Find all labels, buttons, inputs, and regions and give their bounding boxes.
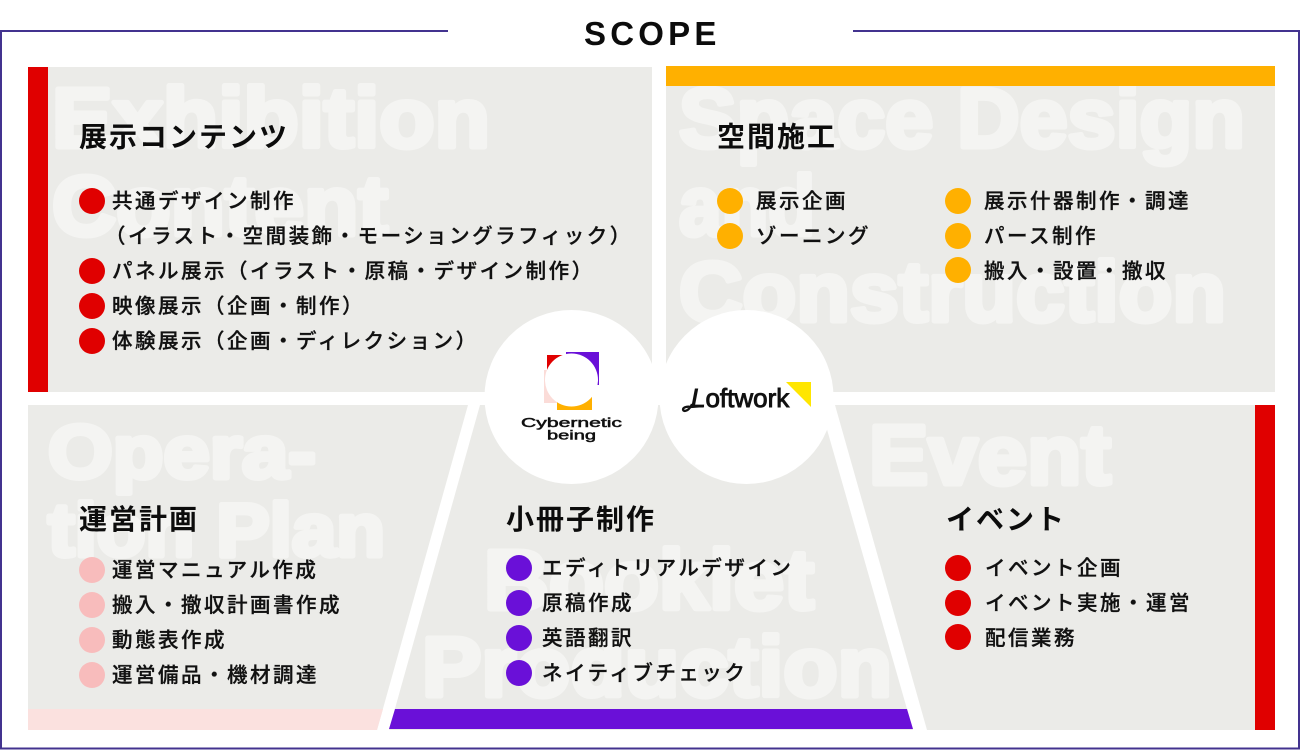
logo text: cybernetic being — [521, 415, 623, 442]
ghost text: event: Event — [869, 408, 1111, 502]
list: exhibition content: 体験展示（企画・ディレクション） — [112, 329, 479, 353]
ghost text: space design and construction: and — [679, 159, 815, 253]
title: SCOPE — [584, 15, 721, 52]
panel: event — [835, 405, 1275, 730]
ghost text: exhibition content: Exhibition — [52, 71, 490, 165]
list: space design left: ゾーニング — [756, 225, 871, 248]
ghost text: space design and construction: Space Design — [679, 71, 1245, 165]
ghost text: space design and construction: Construction — [679, 245, 1226, 339]
ghost text: booklet production: Production — [422, 620, 892, 714]
list: operation plan: 搬入・撤収計画書作成 — [112, 594, 342, 617]
ghost text: operation plan: tion Plan — [48, 488, 385, 572]
list: event: イベント実施・運営 — [985, 592, 1192, 615]
list: exhibition content: 共通デザイン制作 — [112, 189, 296, 213]
ghost text: booklet production: Booklet — [484, 533, 814, 627]
list: space design left: 展示企画 — [756, 190, 848, 213]
heading: space design: 空間施工 — [717, 122, 837, 152]
list: operation plan: 動態表作成 — [112, 629, 227, 652]
list: space design right: 展示什器制作・調達 — [984, 190, 1191, 213]
list: space design right: パース制作 — [984, 225, 1098, 248]
heading: booklet production: 小冊子制作 — [506, 504, 656, 535]
icon: loftwork triangle — [786, 382, 811, 407]
list: booklet production — [506, 555, 793, 686]
list: operation plan: 運営備品・機材調達 — [112, 664, 319, 687]
logo text: loftwork: Loftwork — [691, 383, 790, 413]
list: exhibition content: パネル展示（イラスト・原稿・デザイン制作） — [112, 259, 595, 283]
list: event — [945, 555, 1192, 650]
list: space design right — [945, 188, 1191, 283]
logo text: cybernetic being: being — [547, 428, 596, 442]
panel: exhibition content — [28, 67, 652, 392]
logo text: cybernetic being: Cybernetic — [521, 415, 623, 430]
panel: operation plan — [28, 405, 468, 730]
ghost text: operation plan: Opera- — [48, 410, 316, 494]
heading: event: イベント — [946, 504, 1066, 535]
list: operation plan: 運営マニュアル作成 — [112, 559, 318, 582]
list: booklet production: 原稿作成 — [542, 592, 634, 615]
ghost text: exhibition content: Content — [52, 159, 388, 253]
list: event: 配信業務 — [985, 627, 1077, 650]
panel: booklet production — [389, 405, 913, 730]
list: exhibition content: （イラスト・空間装飾・モーショングラフィック） — [105, 225, 633, 248]
icon: cybernetic being mark — [544, 352, 599, 410]
list: space design right: 搬入・設置・撤収 — [984, 260, 1168, 283]
heading: operation plan: 運営計画 — [79, 504, 199, 535]
list: exhibition content: 映像展示（企画・制作） — [112, 295, 365, 318]
list: booklet production: 英語翻訳 — [542, 627, 634, 650]
list: event: イベント企画 — [985, 557, 1123, 580]
logo circle: cybernetic being — [484, 310, 658, 484]
list: exhibition content — [79, 188, 633, 354]
ghost text: space design and construction — [679, 71, 1245, 339]
heading: exhibition content: 展示コンテンツ — [79, 122, 289, 152]
logo circle: loftwork — [660, 310, 834, 484]
list: space design left — [717, 188, 871, 249]
ghost text: booklet production — [422, 533, 892, 714]
list: booklet production: エディトリアルデザイン — [542, 556, 793, 580]
panel: space design and construction — [666, 66, 1275, 392]
list: booklet production: ネイティブチェック — [542, 661, 747, 685]
ghost text: operation plan — [48, 410, 385, 572]
list: operation plan — [79, 557, 342, 688]
ghost text: exhibition content — [52, 71, 490, 253]
icon: loftwork L swash — [683, 404, 704, 411]
